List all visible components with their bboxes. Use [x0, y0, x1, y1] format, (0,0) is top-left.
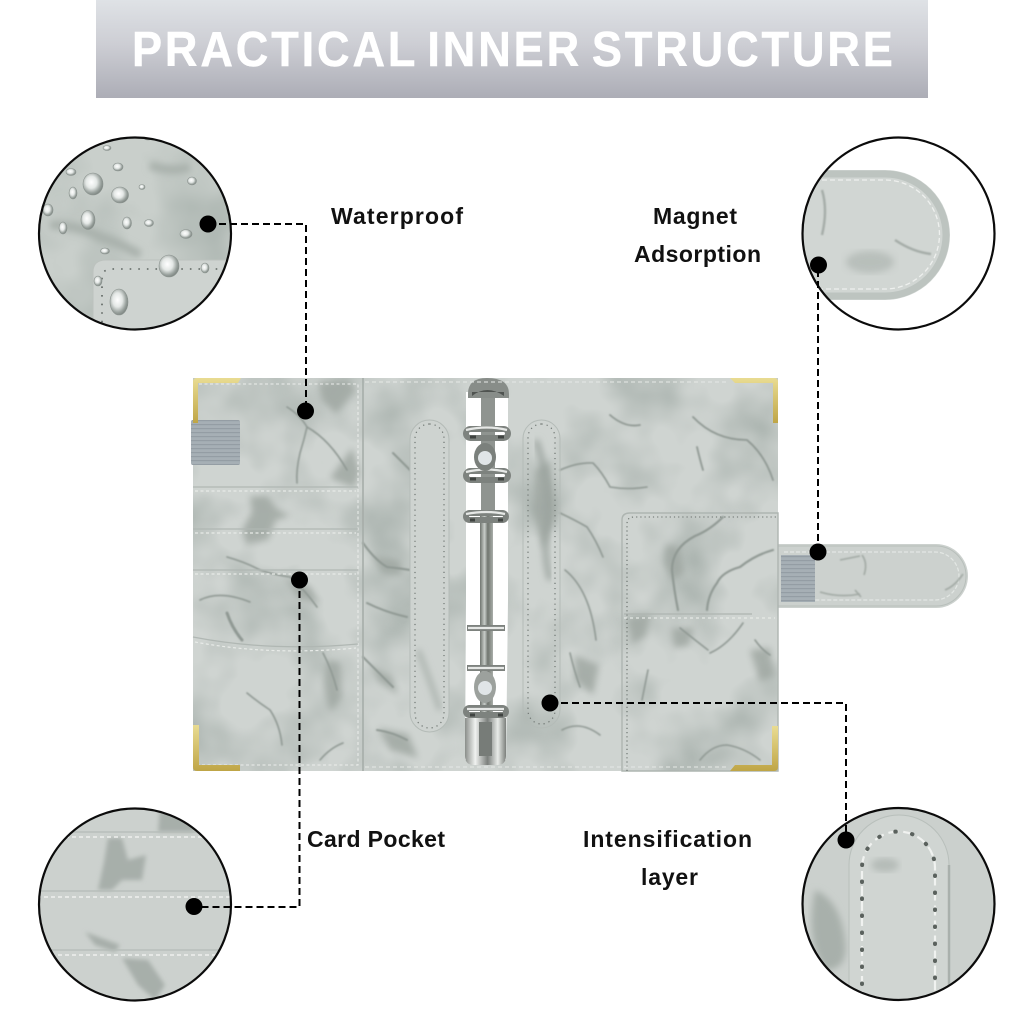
bottom clip — [465, 718, 506, 765]
right strap — [523, 420, 560, 728]
gold corners — [193, 378, 778, 771]
label: intensification layer: Intensification — [583, 826, 752, 852]
open binder product photo — [191, 378, 968, 771]
spine bar — [481, 392, 495, 512]
left strap — [410, 420, 449, 732]
title banner — [96, 0, 928, 98]
rivets — [474, 443, 496, 703]
title: PRACTICAL INNER STRUCTURE — [132, 21, 893, 76]
label: intensification layer: layer — [641, 864, 698, 890]
binder cover — [193, 378, 778, 771]
left card pockets — [193, 487, 358, 651]
label: intensification layer — [583, 826, 752, 890]
left elastic band — [191, 420, 240, 465]
label: card pocket: Card Pocket — [307, 826, 445, 852]
detail circle: waterproof — [38, 136, 232, 331]
callout line: intensification — [550, 703, 846, 840]
label: magnet adsorption: Adsorption — [634, 241, 761, 267]
label: waterproof: Waterproof — [331, 203, 463, 229]
label: magnet adsorption: Magnet — [653, 203, 737, 229]
water droplets — [43, 136, 209, 315]
white metal channel — [465, 392, 508, 760]
pocket seams — [30, 832, 240, 955]
left panel stitching — [199, 384, 358, 765]
callout line: card pocket — [194, 580, 300, 907]
label: magnet adsorption — [634, 203, 761, 267]
rings — [466, 428, 508, 715]
stitched pocket corner — [93, 260, 232, 331]
marble veins — [200, 407, 773, 760]
top clip — [468, 378, 509, 398]
callout line: magnet — [817, 265, 819, 552]
closure strap — [776, 544, 968, 608]
callout line: waterproof — [208, 224, 306, 411]
detail circle: card pocket — [30, 808, 240, 1002]
ring mechanism — [465, 378, 509, 765]
strap elastic — [781, 555, 815, 602]
center panel shadow edges — [362, 378, 364, 771]
right page pockets — [365, 382, 778, 771]
marble blotches — [242, 380, 774, 758]
detail circle: intensification layer — [802, 807, 996, 1001]
detail circle: magnet strap end — [790, 137, 996, 331]
callout dots — [186, 216, 854, 915]
